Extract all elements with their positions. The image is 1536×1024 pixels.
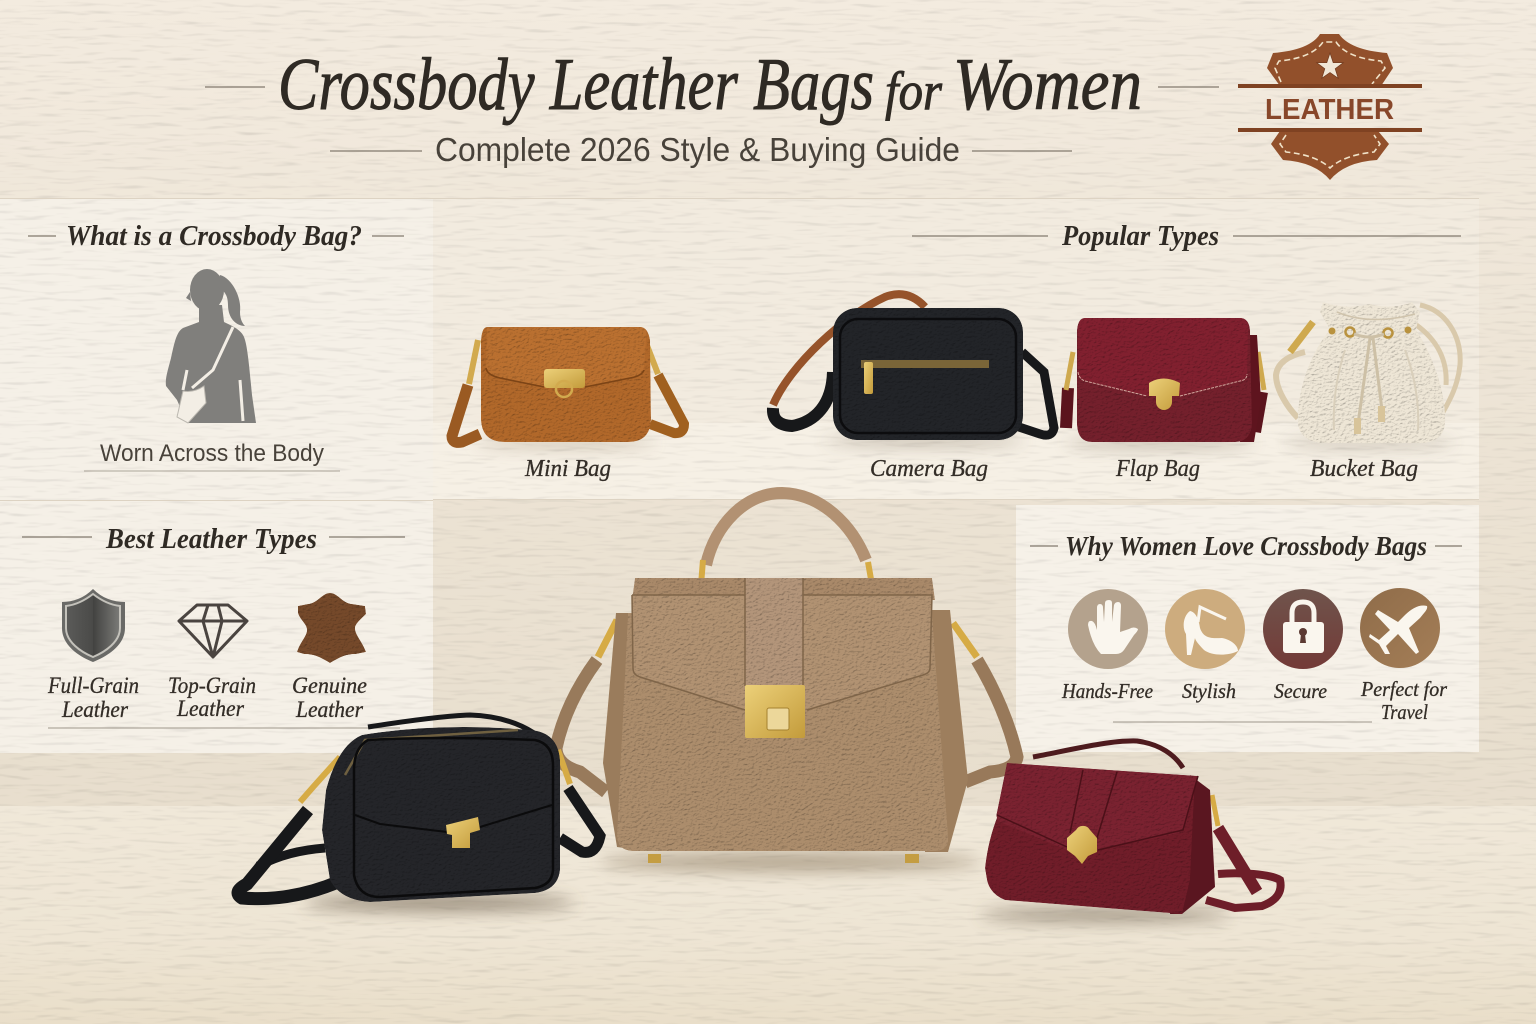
label: top-grain leather: Leather xyxy=(176,696,245,721)
icon: airplane xyxy=(1360,588,1440,668)
icon: padlock xyxy=(1263,589,1343,669)
panel: popular types xyxy=(433,199,1479,423)
bag: bucket bag xyxy=(1276,302,1460,447)
floor surface xyxy=(0,806,1536,1024)
icon: hands-free xyxy=(1068,589,1148,669)
title: Crossbody Leather Bags xyxy=(278,44,874,126)
icon: woman silhouette with crossbody bag xyxy=(166,269,256,423)
icon: leather badge xyxy=(1238,34,1422,180)
bag: burgundy top-handle bag xyxy=(980,741,1281,922)
label: full-grain leather: Full-Grain xyxy=(47,673,139,698)
bag: large tan top-handle bag xyxy=(556,493,1017,871)
bag: flap bag xyxy=(1065,318,1264,447)
icon: leather hide xyxy=(297,593,366,663)
label: perfect for travel: Perfect for xyxy=(1360,677,1448,701)
heading: why women love crossbody bags: Why Women Love Crossbody Bags xyxy=(1065,531,1427,561)
label: camera bag: Camera Bag xyxy=(870,456,988,482)
label: mini bag: Mini Bag xyxy=(524,456,611,482)
label: genuine leather: Genuine xyxy=(292,673,367,698)
bag: mini bag xyxy=(452,327,684,447)
icon: shield xyxy=(62,589,125,662)
heading: what is a crossbody bag: What is a Crossbody Bag? xyxy=(66,221,362,252)
bag: camera bag xyxy=(773,294,1054,445)
label: bucket bag: Bucket Bag xyxy=(1310,456,1418,482)
panel: why women love crossbody bags xyxy=(1016,505,1479,752)
bag: black crossbody bag xyxy=(238,715,600,911)
label: flap bag: Flap Bag xyxy=(1115,456,1200,482)
label: full-grain leather: Leather xyxy=(61,697,129,722)
label: perfect for travel: Travel xyxy=(1381,700,1428,724)
label: hands-free: Hands-Free xyxy=(1061,679,1153,703)
label: genuine leather: Leather xyxy=(295,697,364,722)
icon: leather badge: LEATHER xyxy=(1265,94,1394,126)
heading: best leather types: Best Leather Types xyxy=(105,524,317,555)
icon: stylish high heel xyxy=(1165,589,1245,669)
subtitle: Complete 2026 Style & Buying Guide xyxy=(435,131,960,168)
icon: diamond xyxy=(179,605,247,657)
shelf ledge xyxy=(433,423,1479,499)
label: stylish: Stylish xyxy=(1182,679,1236,703)
label: top-grain leather: Top-Grain xyxy=(168,673,256,698)
title: for xyxy=(885,61,943,121)
label: worn across the body: Worn Across the Body xyxy=(100,440,324,467)
title: Women xyxy=(953,44,1142,126)
label: secure: Secure xyxy=(1274,679,1327,703)
panel: what is a crossbody bag xyxy=(0,199,433,500)
heading: popular types: Popular Types xyxy=(1061,221,1219,252)
panel: best leather types xyxy=(0,501,433,753)
